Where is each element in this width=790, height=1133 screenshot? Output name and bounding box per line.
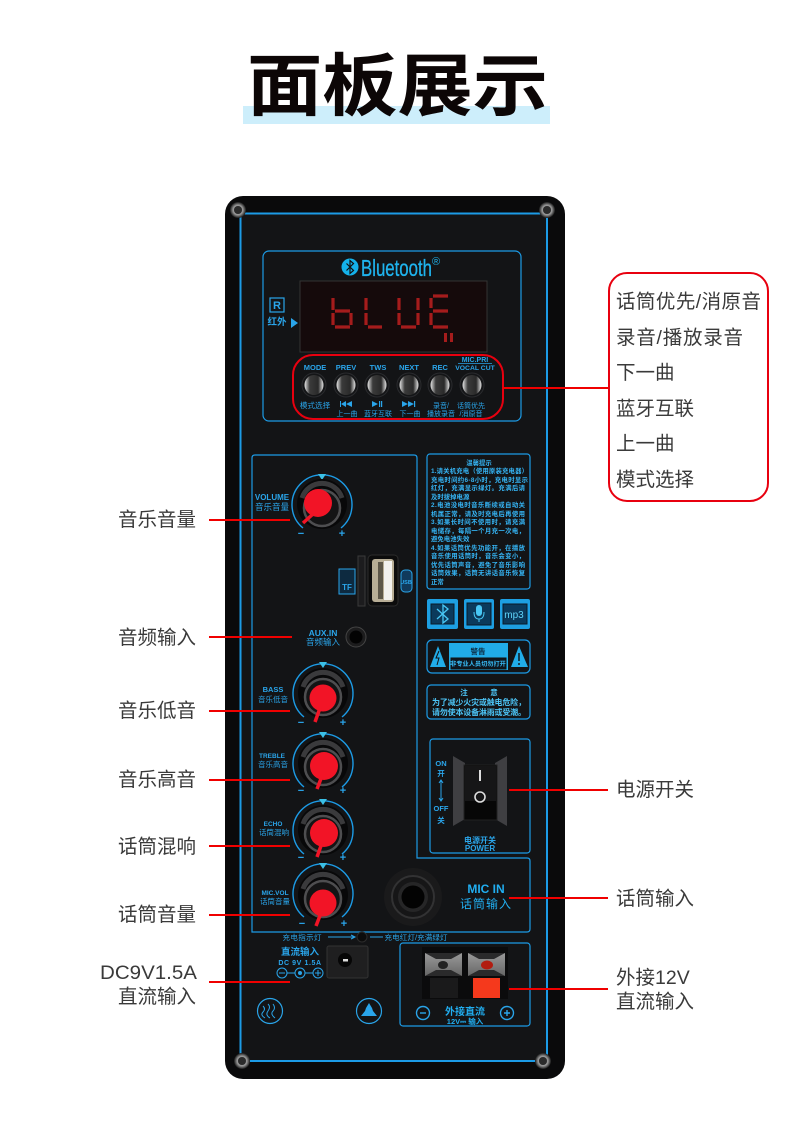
warm tips: 温馨提示 [466, 458, 492, 467]
knob: volume: − [298, 528, 304, 540]
DC input: DC 9V 1.5A [278, 960, 322, 967]
callout box: button functions: 蓝牙互联 [616, 398, 694, 420]
knob: treble: TREBLE [259, 753, 286, 760]
knob: treble: − [298, 785, 304, 797]
buttons: VOCAL CUT [455, 365, 496, 372]
power switch: POWER [465, 844, 495, 853]
knob: treble [258, 732, 353, 797]
mic input jack [384, 868, 442, 926]
callout box: button functions [293, 273, 768, 501]
buttons: PREV [336, 363, 356, 372]
knob: mic volume: 话筒音量 [260, 896, 290, 906]
warm tips: 及时拔掉电源 [431, 492, 470, 501]
warm tips: 优先话筒声音，避免了音乐影响 [431, 560, 526, 569]
warm tips: 正常 [431, 577, 444, 586]
left label: music volume: 音乐音量 [118, 509, 196, 531]
caution note [427, 685, 530, 719]
buttons: /消原音 [460, 409, 482, 418]
caution note: 为了减少火灾或触电危险， [432, 697, 526, 707]
AUX input: AUX.IN [309, 628, 337, 638]
title: 面板展示 [247, 31, 548, 130]
right label: external 12V [509, 967, 694, 1013]
knob: bass: + [340, 717, 346, 729]
knob: volume: + [339, 528, 345, 540]
mic in label: MIC IN [467, 882, 505, 896]
warm tips: 电储存，每隔一个月充一次电， [431, 526, 525, 535]
buttons: 模式选择 [300, 400, 331, 410]
bluetooth logo [342, 255, 440, 281]
knob: echo: ECHO [264, 821, 282, 828]
warm tips: 避免电池失效 [431, 534, 470, 543]
icons: bluetooth, mic, mp3 [427, 599, 530, 629]
buttons: REC [432, 363, 448, 372]
warning sign: 非专业人员切勿打开 [450, 660, 506, 668]
buttons: MODE [304, 363, 326, 372]
knob: mic volume: MIC.VOL [261, 890, 289, 897]
left label: treble: 音乐高音 [118, 769, 196, 791]
mic in label: 话筒输入 [460, 896, 512, 911]
bluetooth logo: Bluetooth [361, 255, 432, 281]
buttons: 下一曲 [400, 409, 420, 418]
IR indicator [267, 298, 298, 328]
left label: DC input: 直流输入 [118, 986, 196, 1008]
external DC terminal [400, 943, 530, 1026]
knob: echo: 话筒混响 [259, 827, 289, 837]
warm tips: 充电时间约6-8小时，充电时显示 [431, 475, 529, 484]
buttons: MIC.PRI [462, 357, 488, 364]
warm tips: 2.电池没电时音乐断续或自动关 [431, 500, 526, 509]
screws [230, 202, 555, 1069]
buttons: NEXT [399, 363, 419, 372]
mic in label [460, 882, 512, 911]
knob: treble: + [340, 785, 346, 797]
right label: external 12V: 直流输入 [616, 991, 694, 1013]
knob: echo [259, 799, 353, 864]
AUX input [306, 627, 366, 647]
buttons: 蓝牙互联 [364, 409, 392, 418]
DC input: 直流输入 [281, 946, 319, 958]
buttons: TWS [370, 363, 386, 372]
knob: treble: 音乐高音 [258, 759, 288, 769]
charging indicator: 充电红灯/充满绿灯 [384, 932, 448, 942]
left label: DC input: DC9V1.5A [100, 962, 197, 984]
callout box: button functions: 模式选择 [616, 469, 694, 491]
knob: volume: VOLUME [255, 493, 290, 502]
buttons [300, 357, 496, 418]
knob: mic volume: − [299, 918, 305, 930]
knob: bass: BASS [263, 685, 283, 694]
warning sign [427, 640, 530, 673]
external DC terminal: 12V⎓ 输入 [447, 1016, 484, 1026]
right label: mic input: 话筒输入 [616, 888, 694, 910]
power switch [430, 739, 530, 853]
knob: mic volume: + [341, 918, 347, 930]
warm tips: 4.如果话筒优先功能开，在播放 [431, 543, 526, 552]
TF and USB ports: USB [400, 580, 412, 586]
left label: DC input [100, 962, 290, 1008]
knob: echo: − [298, 852, 304, 864]
knob: bass: − [298, 717, 304, 729]
warm tips: 音乐使用话筒时，音乐会变小， [431, 551, 525, 560]
bluetooth logo: ® [432, 256, 440, 268]
LED display BLUE [300, 281, 487, 352]
callout box: button functions: 录音/播放录音 [616, 327, 743, 349]
external DC terminal: 外接直流 [445, 1005, 485, 1018]
charging indicator: 充电指示灯 [282, 932, 322, 942]
power switch: 开 [437, 769, 445, 778]
knob panel frame [252, 455, 530, 932]
warm tips: 3.如果长时间不使用时，请充满 [431, 517, 526, 526]
display section frame [263, 251, 521, 421]
charging indicator [282, 932, 448, 942]
right label: power switch: 电源开关 [616, 779, 694, 801]
IR indicator: R [273, 300, 281, 312]
caution note: 注 意 [460, 687, 498, 697]
IR indicator: 红外 [267, 316, 287, 328]
left label: mic volume: 话筒音量 [118, 904, 196, 926]
left label: audio input: 音频输入 [118, 627, 196, 649]
callout box: button functions: 上一曲 [616, 433, 675, 455]
buttons: 话筒优先 [457, 401, 485, 410]
icons: bluetooth, mic, mp3: mp3 [504, 610, 524, 621]
callout box: button functions: 下一曲 [616, 362, 675, 384]
knob: volume: 音乐音量 [255, 502, 289, 512]
warning sign: 警告 [470, 646, 486, 656]
knob: volume [255, 474, 352, 540]
AUX input: 音频输入 [306, 637, 340, 647]
knob: echo: + [340, 852, 346, 864]
logos [258, 998, 382, 1024]
callout box: button functions: 话筒优先/消原音 [616, 291, 761, 313]
left label: echo: 话筒混响 [118, 836, 196, 858]
right label: external 12V: 外接12V [616, 967, 690, 989]
left label: bass: 音乐低音 [118, 700, 196, 722]
buttons: 录音/ [433, 401, 449, 410]
warm tips [427, 454, 530, 589]
panel: control board [225, 196, 565, 1079]
warm tips: 红灯，充满显示绿灯。充满后请 [431, 483, 526, 492]
TF and USB ports: TF [342, 583, 352, 592]
buttons: 上一曲 [336, 409, 358, 418]
power switch: ON [435, 759, 447, 768]
buttons: 播放录音 [427, 409, 455, 418]
power switch: 关 [437, 815, 445, 825]
warm tips: 1.请关机充电（使用原装充电器） [431, 466, 528, 475]
power switch: OFF [434, 804, 449, 813]
caution note: 请勿使本设备淋雨或受潮。 [432, 707, 526, 717]
TF and USB ports [339, 555, 412, 606]
power switch: 电源开关 [464, 835, 496, 845]
knob: bass: 音乐低音 [258, 694, 288, 704]
warm tips: 机属正常，请及时充电后再使用 [431, 509, 525, 518]
DC input [277, 946, 368, 978]
warm tips: 话筒效果，话筒无讲话音乐恢复 [431, 568, 526, 577]
knob: mic volume [260, 863, 353, 930]
knob: bass [258, 662, 353, 729]
